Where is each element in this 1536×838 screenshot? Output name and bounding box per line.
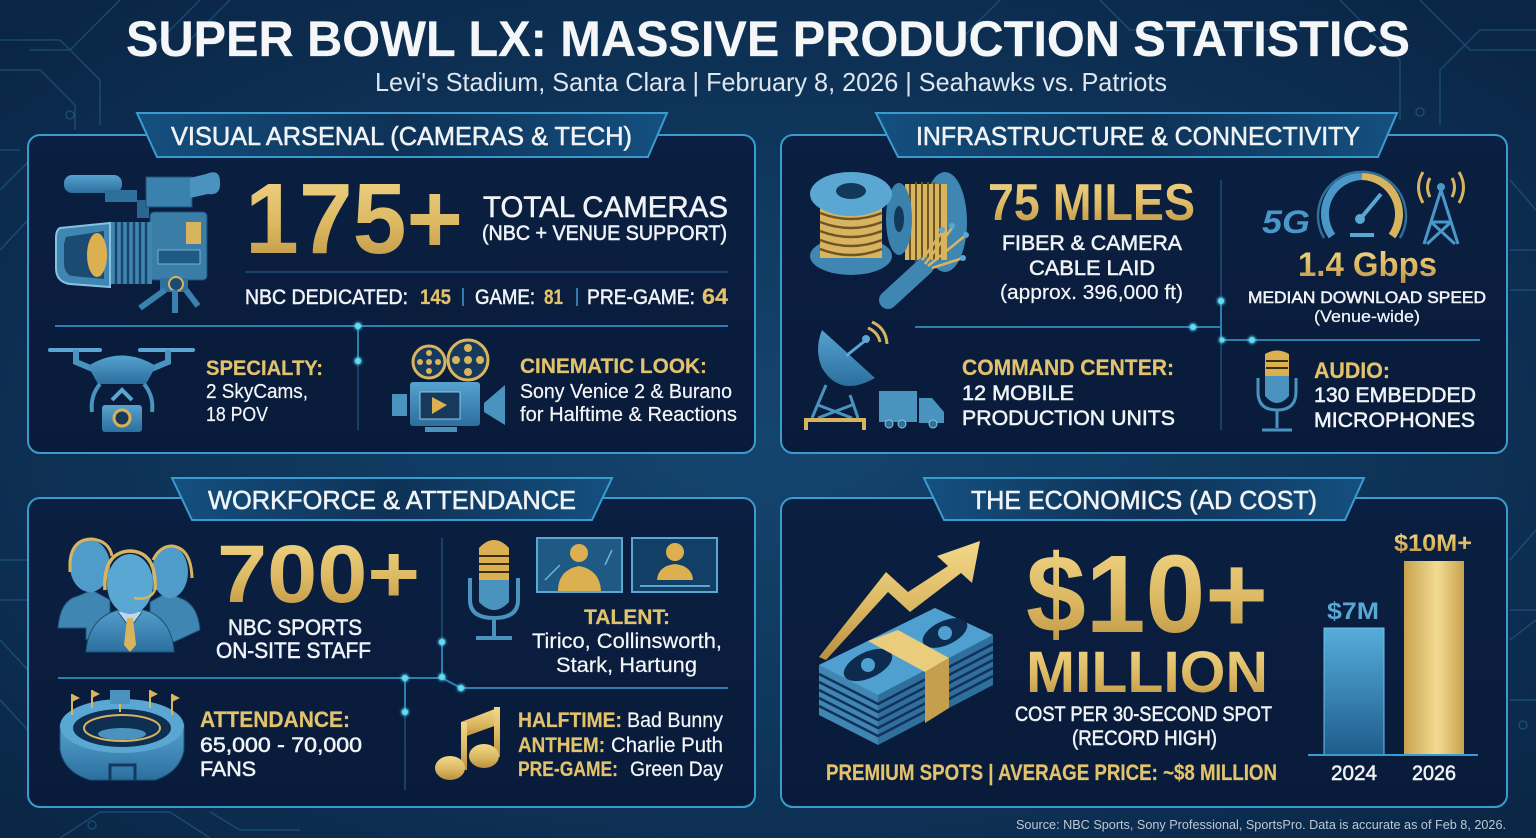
icon: microphone bbox=[1258, 350, 1296, 430]
title: SUPER BOWL LX: MASSIVE PRODUCTION STATISTICS bbox=[126, 11, 1410, 67]
stat row: camera breakdown: 145 bbox=[420, 286, 451, 309]
big stat: 700+: 700+ bbox=[217, 529, 420, 620]
icon: stadium bbox=[60, 690, 184, 780]
text: attendance: 65,000 - 70,000 bbox=[200, 734, 362, 757]
label: nbc + venue support: (NBC + VENUE SUPPORT) bbox=[482, 222, 727, 245]
label: median download speed bbox=[1248, 288, 1486, 326]
bar chart: ad cost: 2026 bbox=[1412, 762, 1456, 785]
panel: infrastructure bbox=[781, 113, 1507, 453]
text: halftime, anthem, pre-game: Green Day bbox=[630, 758, 723, 781]
text: specialty: 18 POV bbox=[206, 404, 269, 426]
text: audio: AUDIO: bbox=[1314, 358, 1390, 383]
text: audio: 130 EMBEDDED bbox=[1314, 384, 1476, 407]
label: nbc sports staff: ON-SITE STAFF bbox=[216, 638, 371, 663]
heading: economics: THE ECONOMICS (AD COST) bbox=[971, 485, 1317, 515]
text: cinematic look: for Halftime & Reactions bbox=[520, 404, 737, 426]
icon: 5G speed gauge bbox=[1262, 172, 1406, 240]
heading: infrastructure: INFRASTRUCTURE & CONNECTIVITY bbox=[916, 121, 1360, 151]
bar chart: ad cost: $10M+ bbox=[1394, 530, 1472, 557]
text: halftime, anthem, pre-game: Bad Bunny bbox=[627, 709, 723, 732]
icon: music note bbox=[435, 707, 500, 780]
label: median download speed: MEDIAN DOWNLOAD SPEED bbox=[1248, 288, 1486, 307]
stat row: camera breakdown: 81 bbox=[544, 286, 563, 309]
heading: visual arsenal bbox=[137, 113, 667, 157]
label: nbc sports staff: NBC SPORTS bbox=[228, 615, 362, 640]
text: attendance: ATTENDANCE: bbox=[200, 707, 350, 732]
big stat: $10+: $10+ bbox=[1026, 533, 1268, 656]
text: command center: COMMAND CENTER: bbox=[962, 355, 1174, 380]
text: command center bbox=[962, 355, 1175, 430]
icon: monitor with presenter bbox=[537, 538, 622, 592]
text: specialty: SPECIALTY: bbox=[206, 357, 323, 380]
text: cinematic look: Sony Venice 2 & Burano bbox=[520, 381, 732, 403]
label: premium spots: PREMIUM SPOTS | AVERAGE PRICE: ~$8 MILLION bbox=[826, 760, 1277, 785]
heading: visual arsenal: VISUAL ARSENAL (CAMERAS & TECH) bbox=[171, 121, 632, 151]
stat row: camera breakdown: GAME: bbox=[475, 286, 535, 309]
source note: Source: NBC Sports, Sony Professional, SportsPro. Data is accurate as of Feb 8, 2026. bbox=[1016, 817, 1506, 832]
bar chart: ad cost: $7M bbox=[1327, 598, 1379, 625]
heading: economics bbox=[924, 478, 1364, 520]
text: talent bbox=[532, 606, 722, 677]
big stat: million: MILLION bbox=[1026, 640, 1268, 705]
stat row: camera breakdown: NBC DEDICATED: bbox=[245, 286, 408, 309]
text: halftime, anthem, pre-game: PRE-GAME: bbox=[518, 758, 618, 781]
text: halftime, anthem, pre-game: ANTHEM: bbox=[518, 734, 605, 757]
icon: cable spool bbox=[810, 172, 969, 300]
icon: money stack bbox=[819, 608, 993, 745]
panel: workforce bbox=[28, 478, 755, 807]
icon: talent microphone bbox=[470, 540, 518, 638]
heading: infrastructure bbox=[876, 113, 1397, 157]
text: audio: MICROPHONES bbox=[1314, 409, 1475, 432]
label: fiber and camera cable bbox=[1000, 232, 1183, 304]
icon: staff with headsets bbox=[58, 539, 200, 652]
stat row: camera breakdown: 64 bbox=[702, 284, 729, 309]
heading: workforce: WORKFORCE & ATTENDANCE bbox=[208, 485, 576, 515]
icon: video camera bbox=[56, 172, 220, 313]
stat row: camera breakdown bbox=[245, 284, 729, 309]
text: talent: Tirico, Collinsworth, bbox=[532, 630, 722, 653]
label: median download speed: (Venue-wide) bbox=[1314, 307, 1420, 326]
label: cost per spot bbox=[1015, 703, 1272, 750]
subtitle: Levi's Stadium, Santa Clara | February 8, 2026 | Seahawks vs. Patriots bbox=[375, 67, 1167, 97]
bar chart: ad cost: 2024 bbox=[1331, 762, 1377, 785]
panel: economics bbox=[781, 478, 1507, 807]
icon: satellite dish and truck bbox=[806, 322, 944, 430]
big stat: 175+: 175+ bbox=[245, 163, 463, 275]
heading: workforce bbox=[172, 478, 612, 520]
stat: 1.4 Gbps: 1.4 Gbps bbox=[1298, 246, 1437, 284]
text: talent: Stark, Hartung bbox=[556, 654, 697, 677]
label: fiber and camera cable: CABLE LAID bbox=[1029, 257, 1155, 280]
label: fiber and camera cable: FIBER & CAMERA bbox=[1002, 232, 1182, 255]
text: command center: PRODUCTION UNITS bbox=[962, 407, 1175, 430]
text: halftime, anthem, pre-game: Charlie Puth bbox=[611, 734, 723, 757]
text: cinematic look: CINEMATIC LOOK: bbox=[520, 355, 707, 378]
label: nbc sports staff bbox=[216, 615, 371, 663]
bar chart: ad cost bbox=[1308, 530, 1478, 785]
text: specialty: 2 SkyCams, bbox=[206, 381, 308, 403]
text: talent: TALENT: bbox=[584, 606, 670, 629]
label: cost per spot: COST PER 30-SECOND SPOT bbox=[1015, 703, 1272, 726]
icon: film camera bbox=[392, 340, 505, 432]
icon: 5G speed gauge: 5G bbox=[1262, 204, 1310, 240]
label: cost per spot: (RECORD HIGH) bbox=[1072, 727, 1217, 750]
text: attendance: FANS bbox=[200, 758, 256, 781]
big stat: 75 miles: 75 MILES bbox=[988, 174, 1195, 232]
label: total cameras: TOTAL CAMERAS bbox=[483, 191, 728, 224]
icon: drone bbox=[50, 350, 193, 432]
text: audio bbox=[1314, 358, 1476, 432]
text: cinematic look bbox=[520, 355, 737, 426]
text: halftime, anthem, pre-game bbox=[518, 709, 723, 781]
icon: cell tower bbox=[1418, 172, 1464, 244]
text: halftime, anthem, pre-game: HALFTIME: bbox=[518, 709, 622, 732]
label: fiber and camera cable: (approx. 396,000 ft) bbox=[1000, 282, 1183, 304]
icon: rising arrow bbox=[819, 541, 980, 660]
icon: monitor with analyst bbox=[632, 538, 717, 592]
stat row: camera breakdown: PRE-GAME: bbox=[587, 286, 695, 309]
text: specialty bbox=[206, 357, 323, 426]
panel: visual arsenal bbox=[28, 113, 755, 453]
text: command center: 12 MOBILE bbox=[962, 382, 1074, 405]
text: attendance bbox=[200, 707, 362, 781]
